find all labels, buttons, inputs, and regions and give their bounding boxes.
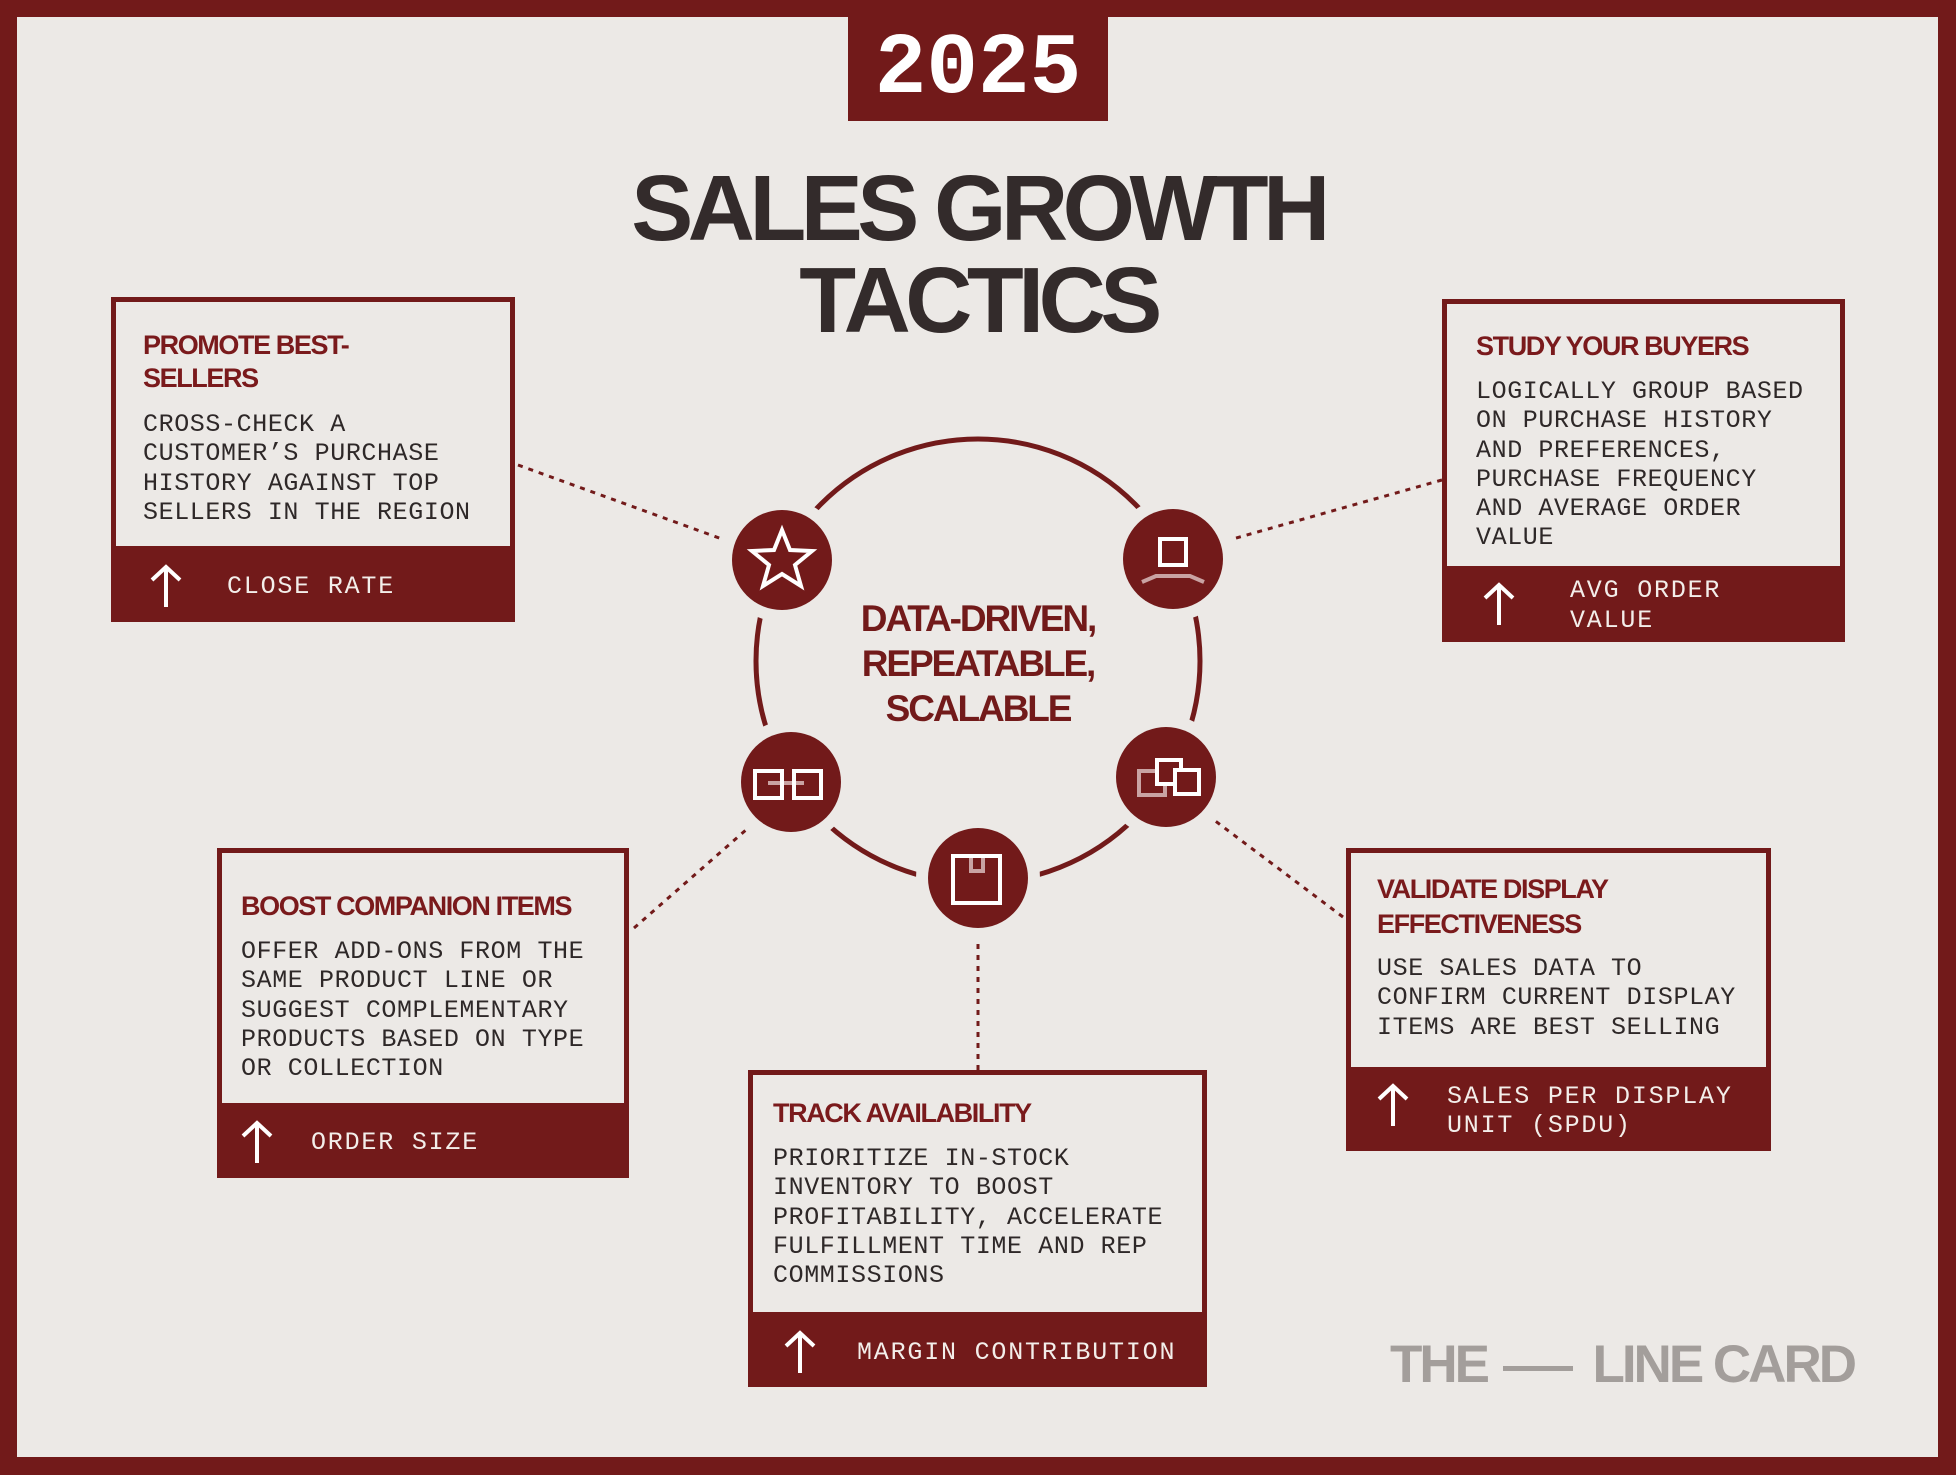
icon: box — [916, 816, 1040, 940]
panel: study your buyers — [1442, 299, 1845, 642]
text: ITEMS ARE BEST SELLING — [1377, 1013, 1720, 1042]
text: FULFILLMENT TIME AND REP — [773, 1232, 1147, 1261]
heading: SELLERS — [143, 363, 258, 393]
heading: PROMOTE BEST- — [143, 330, 348, 360]
center text: SCALABLE — [886, 688, 1070, 729]
metric: CLOSE RATE — [227, 572, 395, 601]
heading: VALIDATE DISPLAY — [1377, 874, 1608, 904]
icon: companion — [729, 720, 853, 844]
text: CONFIRM CURRENT DISPLAY — [1377, 983, 1736, 1012]
center text — [861, 598, 1095, 729]
icon: display — [1104, 715, 1228, 839]
metric — [1570, 576, 1721, 635]
logo: THE LINE CARD — [1390, 1335, 1854, 1394]
icon: arrow — [784, 1330, 816, 1373]
text — [1476, 377, 1804, 552]
text: LOGICALLY GROUP BASED — [1476, 377, 1804, 406]
icon: arrow — [1484, 582, 1514, 625]
heading: TRACK AVAILABILITY — [773, 1098, 1031, 1128]
icon: arrow — [150, 564, 182, 607]
text: SAME PRODUCT LINE OR — [241, 966, 553, 995]
icon: arrow — [242, 1120, 272, 1163]
title — [631, 156, 1325, 352]
heading: STUDY YOUR BUYERS — [1476, 331, 1748, 361]
panel: track availability — [748, 1070, 1207, 1387]
text: VALUE — [1476, 523, 1554, 552]
text: PRODUCTS BASED ON TYPE — [241, 1025, 584, 1054]
metric: AVG ORDER — [1570, 576, 1721, 605]
text: HISTORY AGAINST TOP — [143, 469, 439, 498]
text: PURCHASE FREQUENCY — [1476, 465, 1757, 494]
text: COMMISSIONS — [773, 1261, 945, 1290]
text: SELLERS IN THE REGION — [143, 498, 471, 527]
icon: star — [720, 498, 844, 622]
text — [143, 410, 471, 527]
text: CUSTOMER’S PURCHASE — [143, 439, 439, 468]
center text: REPEATABLE, — [862, 643, 1094, 684]
text — [1377, 954, 1736, 1042]
metric — [1447, 1082, 1733, 1140]
ring — [756, 439, 1200, 883]
text: USE SALES DATA TO — [1377, 954, 1642, 983]
text — [241, 937, 584, 1083]
text: PROFITABILITY, ACCELERATE — [773, 1203, 1163, 1232]
heading: BOOST COMPANION ITEMS — [241, 891, 571, 921]
title: SALES GROWTH — [631, 156, 1325, 260]
icon: buyers — [1111, 497, 1235, 621]
text: PRIORITIZE IN-STOCK — [773, 1144, 1069, 1173]
text: OR COLLECTION — [241, 1054, 444, 1083]
year tab: 2025 — [875, 20, 1081, 118]
text: ON PURCHASE HISTORY — [1476, 406, 1772, 435]
text: CROSS-CHECK A — [143, 410, 346, 439]
heading — [143, 330, 349, 393]
text: SUGGEST COMPLEMENTARY — [241, 996, 569, 1025]
metric: VALUE — [1570, 606, 1654, 635]
text — [773, 1144, 1163, 1290]
metric: SALES PER DISPLAY — [1447, 1082, 1733, 1111]
text: OFFER ADD-ONS FROM THE — [241, 937, 584, 966]
title: TACTICS — [799, 248, 1157, 352]
text: AND AVERAGE ORDER — [1476, 494, 1741, 523]
metric: ORDER SIZE — [311, 1128, 479, 1157]
metric: UNIT (SPDU) — [1447, 1111, 1632, 1140]
connectors — [518, 465, 1442, 1070]
heading — [1377, 874, 1608, 939]
panel: validate display effectiveness — [1346, 848, 1771, 1151]
icon: arrow — [1378, 1083, 1408, 1126]
heading: EFFECTIVENESS — [1377, 909, 1581, 939]
panel: boost companion items — [217, 848, 629, 1178]
metric: MARGIN CONTRIBUTION — [857, 1338, 1176, 1367]
panel: promote best-sellers — [111, 297, 515, 622]
text: AND PREFERENCES, — [1476, 436, 1726, 465]
text: INVENTORY TO BOOST — [773, 1173, 1054, 1202]
center text: DATA-DRIVEN, — [861, 598, 1095, 639]
